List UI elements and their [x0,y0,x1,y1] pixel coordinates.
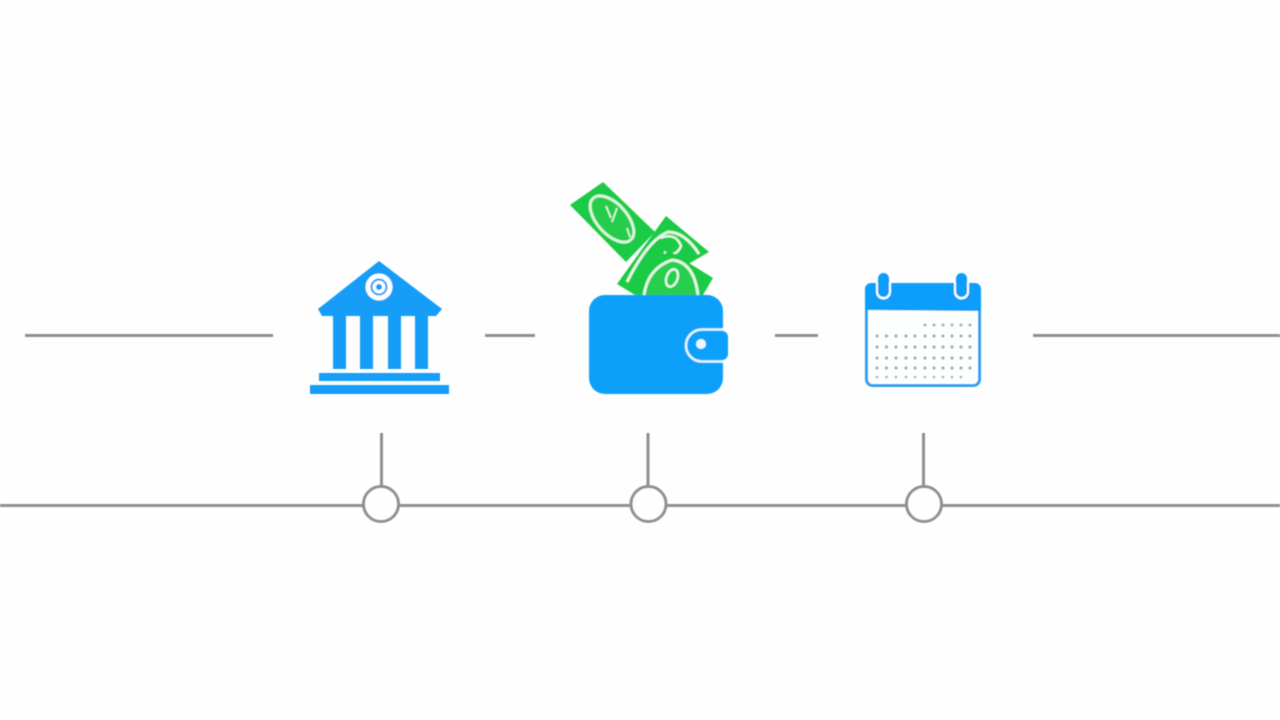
timeline axis with markers [0,433,1280,522]
icon: bank [310,261,449,394]
calendar date grid [875,324,972,378]
icon: wallet [589,295,728,394]
marker: wallet [631,433,666,522]
marker: calendar [906,433,942,522]
marker: bank [364,433,398,522]
wallet clasp [686,330,728,362]
calendar rings [876,273,969,300]
banknote: front [636,250,713,295]
icon: green banknotes [570,182,713,295]
icon: calendar [865,273,981,386]
banknote: middle [617,216,709,295]
banknote: rear [570,182,655,262]
